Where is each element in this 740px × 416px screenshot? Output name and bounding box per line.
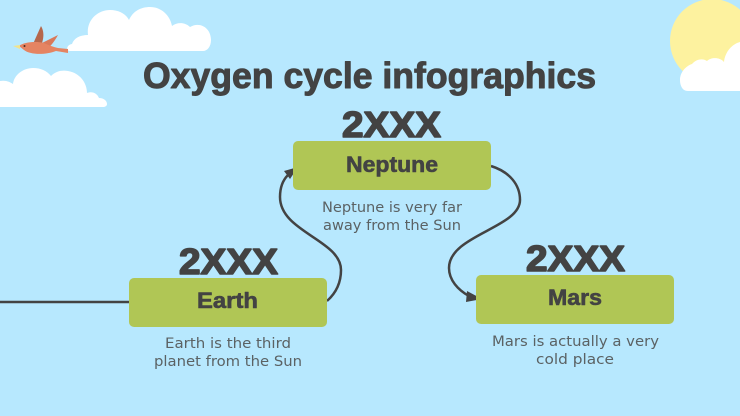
description: Earth: Earth is the third	[165, 336, 291, 352]
year: Mars: 2XXX	[526, 238, 625, 279]
description: Mars: Mars is actually a very	[492, 334, 659, 350]
year: Neptune: 2XXX	[342, 104, 441, 145]
description: Earth: planet from the Sun	[154, 354, 302, 370]
arrow: Earth to Neptune	[280, 167, 341, 301]
step: Earth	[129, 241, 327, 370]
label: Neptune: Neptune	[346, 152, 438, 177]
description: Neptune: Neptune is very far	[322, 200, 462, 216]
step: Mars	[476, 238, 674, 368]
description: Neptune	[322, 200, 462, 234]
icon: bird	[13, 26, 68, 54]
box: Mars	[476, 275, 674, 324]
icon: sun	[670, 0, 740, 83]
arrow: Neptune to Mars	[449, 166, 520, 302]
description: Mars	[492, 334, 659, 368]
start line	[0, 301, 130, 303]
year: Earth: 2XXX	[179, 241, 278, 282]
box: Neptune	[293, 141, 491, 190]
label: Mars: Mars	[548, 285, 602, 310]
box: Earth	[129, 278, 327, 327]
description: Neptune: away from the Sun	[323, 218, 461, 234]
title: Oxygen cycle infographics	[143, 55, 596, 96]
description: Earth	[154, 336, 302, 370]
step: Neptune	[293, 104, 491, 234]
icon: cloud over sun	[680, 42, 740, 91]
label: Earth: Earth	[197, 288, 258, 313]
description: Mars: cold place	[536, 352, 614, 368]
icon: lower cloud	[0, 68, 107, 107]
icon: upper cloud	[67, 7, 211, 51]
